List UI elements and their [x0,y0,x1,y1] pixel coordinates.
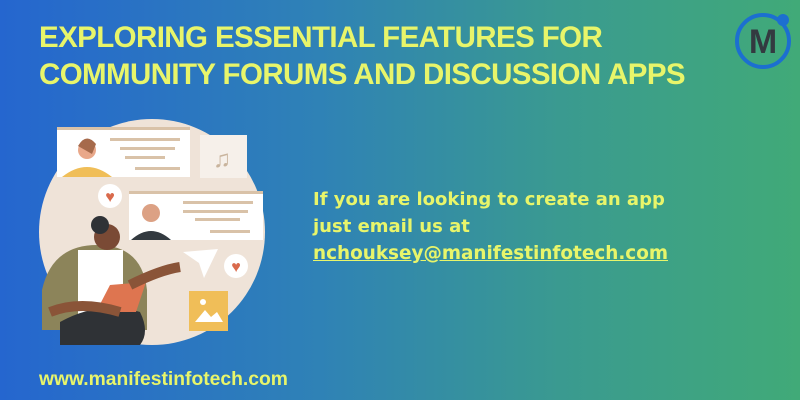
title: COMMUNITY FORUMS AND DISCUSSION APPS [39,58,685,91]
music card [200,135,247,178]
image icon [189,291,228,331]
url: www.manifestinfotech.com [39,369,288,390]
person [42,216,180,345]
logo: M [749,23,777,61]
card 1 [57,127,190,177]
message: If you are looking to create an app [313,189,665,210]
hearts: ♥ [231,259,241,276]
paper plane [183,249,218,278]
title: EXPLORING ESSENTIAL FEATURES FOR [39,21,602,54]
message: just email us at [313,216,470,237]
card 2 [129,191,263,240]
logo [735,13,791,69]
music card: ♫ [213,146,231,173]
title [39,21,685,91]
illustration [39,119,265,345]
hearts: ♥ [105,189,115,206]
message [312,189,668,264]
hearts [98,184,248,278]
message: nchouksey@manifestinfotech.com [313,243,668,264]
